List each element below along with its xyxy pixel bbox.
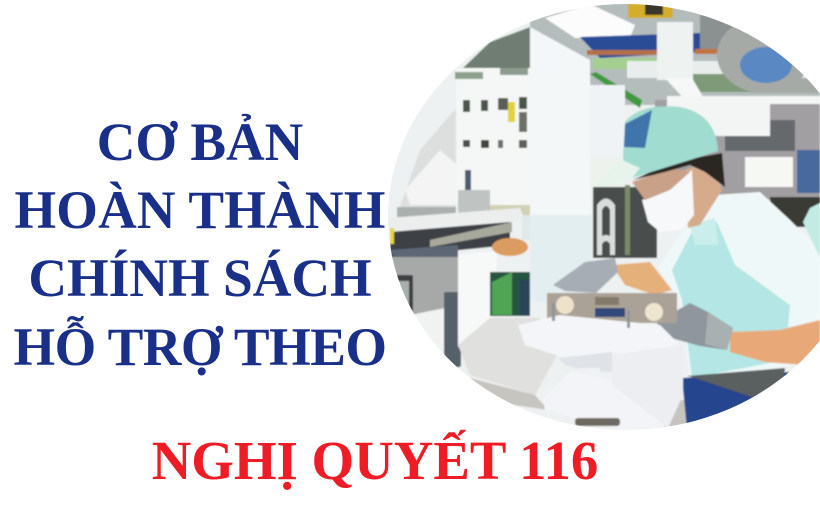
dark arches: [593, 187, 657, 258]
gloves: [553, 258, 618, 293]
trousers: [682, 371, 790, 423]
floor: [458, 318, 557, 395]
title: [13, 112, 387, 377]
fan: [716, 26, 804, 92]
green crate: [490, 272, 530, 316]
sink and pedestal: [518, 314, 674, 356]
title line 4: HỖ TRỢ THEO: [13, 317, 387, 377]
back arm: [492, 238, 528, 256]
left machine background: [400, 110, 456, 208]
ceiling: [530, 0, 820, 105]
white pedestal: [458, 250, 498, 347]
hair: [633, 153, 725, 187]
title line 2: HOÀN THÀNH: [14, 180, 386, 240]
worker shirt: [715, 191, 798, 228]
factory photo in ellipse: [388, 4, 820, 430]
title line 1: CƠ BẢN: [97, 112, 303, 172]
face: [632, 168, 690, 200]
title line 3: CHÍNH SÁCH: [28, 248, 372, 308]
neck and ear: [685, 160, 722, 228]
table: [405, 208, 524, 220]
cap: [623, 106, 718, 180]
curtain: [529, 26, 591, 216]
back wall: [655, 100, 820, 200]
second worker at edge: [803, 203, 820, 258]
mask: [642, 170, 694, 232]
red subtitle: NGHỊ QUYẾT 116: [152, 430, 598, 491]
fixture: [547, 293, 677, 323]
forearms: [612, 262, 672, 295]
